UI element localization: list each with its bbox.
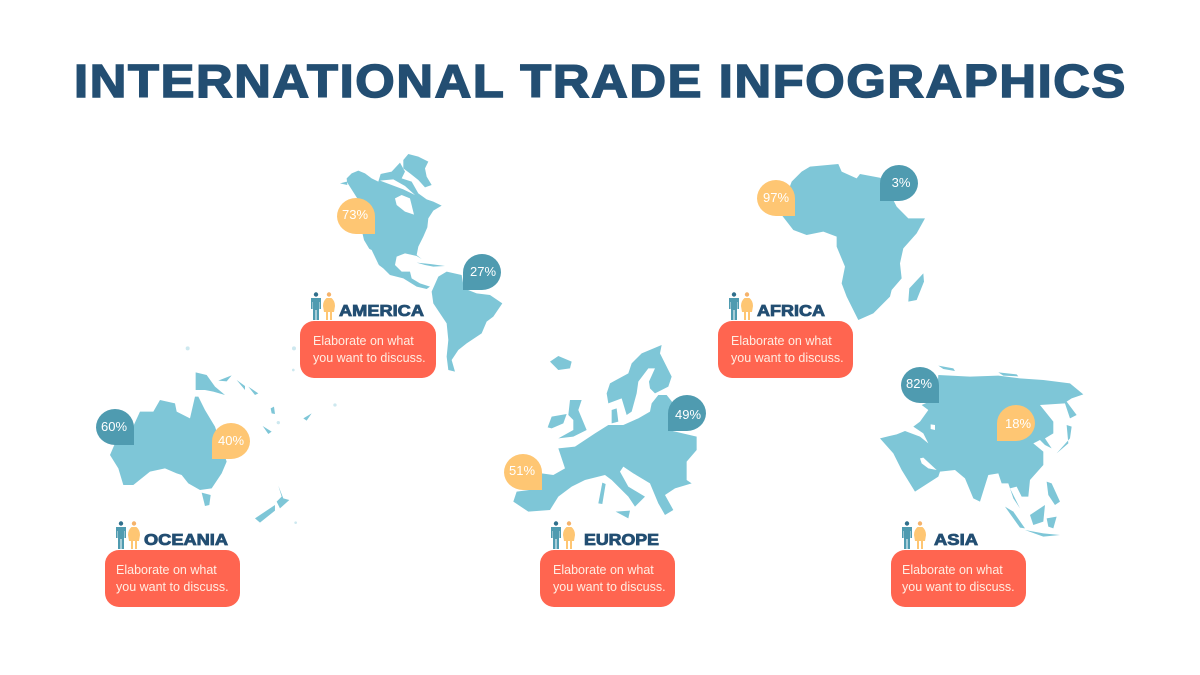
card: america [300,321,436,378]
card: africa: Elaborate on what [731,334,832,348]
card: africa: you want to discuss. [731,351,844,365]
pin: 18% [997,405,1035,441]
pin: 49%: 49% [675,407,701,422]
map: oceania [110,346,337,524]
pin: 49% [668,395,706,431]
pin: 3%: 3% [892,175,911,190]
card: asia: Elaborate on what [902,563,1003,577]
panel: asia [880,366,1083,607]
card: oceania: you want to discuss. [116,580,229,594]
heading: america: AMERICA [339,303,424,320]
pin: 73%: 73% [342,207,368,222]
card: europe: Elaborate on what [553,563,654,577]
heading: africa: AFRICA [757,303,825,320]
icon: people [551,521,575,549]
card: oceania [105,550,240,607]
card: oceania: Elaborate on what [116,563,217,577]
map: africa [782,164,925,320]
icon: people [902,521,926,549]
card: america: Elaborate on what [313,334,414,348]
pin: 60% [96,409,134,445]
pin: 18%: 18% [1005,416,1031,431]
icon: people [311,292,335,320]
pin: 51%: 51% [509,463,535,478]
pin: 3% [880,165,918,201]
pin: 60%: 60% [101,419,127,434]
pin: 40% [212,423,250,459]
title: INTERNATIONAL TRADE INFOGRAPHICS [74,55,1127,107]
card: asia: you want to discuss. [902,580,1015,594]
pin: 51% [504,454,542,490]
map: north and south america [340,154,502,372]
pin: 73% [337,198,375,234]
heading: oceania: OCEANIA [144,532,228,549]
pin: 97%: 97% [763,190,789,205]
map: europe [513,345,697,518]
pin: 82%: 82% [906,376,932,391]
panel: africa [718,164,925,378]
card: europe: you want to discuss. [553,580,666,594]
heading: asia: ASIA [934,532,978,549]
card: america: you want to discuss. [313,351,426,365]
icon: people [729,292,753,320]
pin: 82% [901,367,939,403]
icon: people [116,521,140,549]
card: asia [891,550,1026,607]
card: europe [540,550,675,607]
map: asia [880,366,1083,537]
pin: 27% [463,254,501,290]
pin: 27%: 27% [470,264,496,279]
panel: europe [504,345,706,607]
panel: america [300,154,502,378]
heading: europe: EUROPE [584,532,659,549]
panel: oceania [96,346,337,607]
pin: 97% [757,180,795,216]
pin: 40%: 40% [218,433,244,448]
card: africa [718,321,853,378]
